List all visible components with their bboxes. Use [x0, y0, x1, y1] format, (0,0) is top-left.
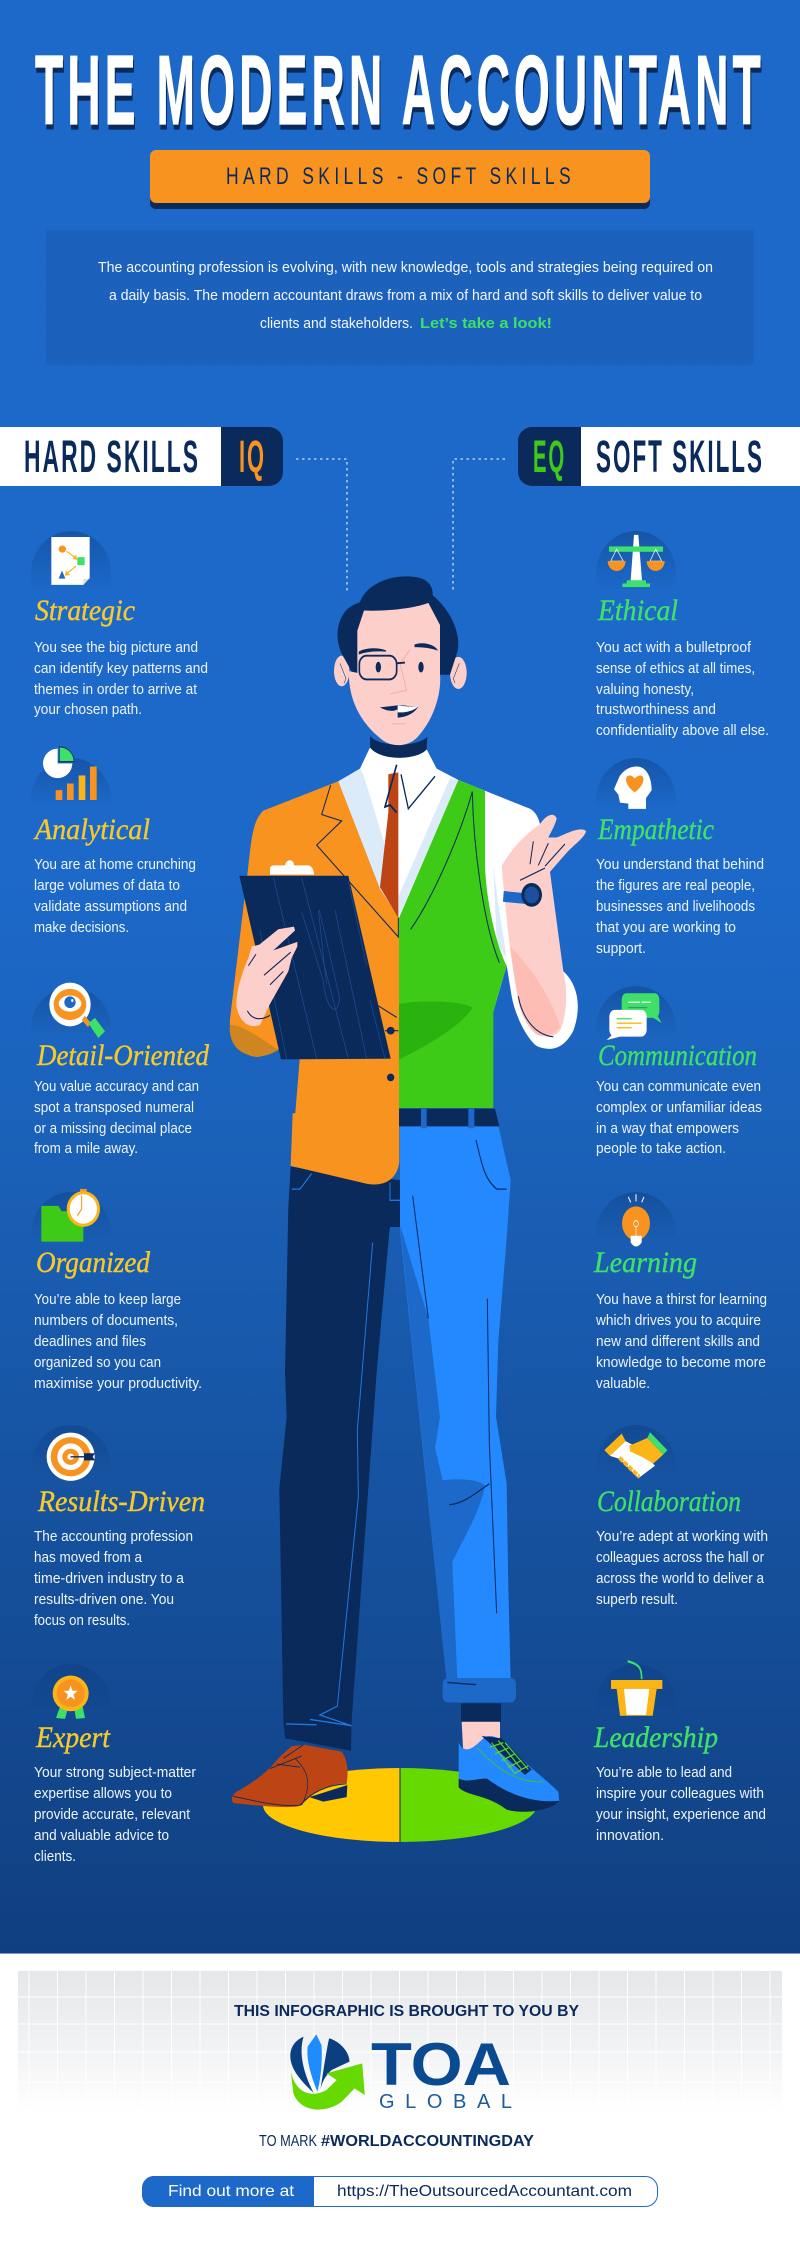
icon: light bulb	[596, 1192, 676, 1247]
heading: Strategic	[35, 594, 135, 627]
figure upper body	[230, 576, 586, 1146]
description	[34, 1079, 199, 1157]
icon: folder and clock	[31, 1189, 111, 1242]
description: confidentiality above all else.	[596, 723, 769, 739]
description: innovation.	[596, 1828, 664, 1844]
floor ellipse	[263, 1768, 537, 1842]
description: superb result.	[596, 1592, 678, 1608]
banner: hard skills IQ: HARD SKILLS	[24, 431, 200, 482]
description	[34, 640, 208, 718]
description: You see the big picture and	[34, 640, 198, 656]
subtitle button	[150, 150, 650, 209]
description: You understand that behind	[596, 857, 764, 873]
banner: soft skills EQ	[518, 427, 800, 486]
heading: Results-Driven	[37, 1485, 205, 1518]
description: has moved from a	[34, 1550, 143, 1566]
description: make decisions.	[34, 920, 129, 936]
banner: soft skills EQ: EQ	[533, 431, 566, 482]
panel: Organized	[31, 1189, 202, 1392]
figure: accountant	[230, 576, 586, 1812]
icon: target and dart	[31, 1425, 111, 1481]
description: your chosen path.	[34, 702, 142, 718]
subtitle button: HARD SKILLS - SOFT SKILLS	[226, 163, 575, 190]
description: colleagues across the hall or	[596, 1550, 764, 1566]
description: the figures are real people,	[596, 878, 755, 894]
logo: TOA Global: GLOBAL	[379, 2091, 512, 2113]
call to action pill: Find out more at	[168, 2183, 295, 2200]
panel: introduction: Let’s take a look!	[420, 315, 552, 332]
heading: Ethical	[597, 594, 678, 627]
description	[595, 1292, 767, 1392]
hashtag line: #WORLDACCOUNTINGDAY	[321, 2133, 534, 2150]
description: results-driven one. You	[34, 1592, 174, 1608]
panel: introduction: clients and stakeholders.	[260, 315, 413, 332]
description: valuable.	[596, 1376, 650, 1392]
description	[34, 1292, 202, 1392]
panel: Analytical	[31, 747, 196, 936]
icon: handshake	[596, 1425, 676, 1478]
panel: Leadership	[593, 1661, 766, 1844]
description: sense of ethics at all times,	[596, 661, 755, 677]
connector: right dotted line	[453, 459, 505, 592]
description: You have a thirst for learning	[596, 1292, 767, 1308]
call to action pill	[142, 2176, 658, 2207]
description: clients.	[34, 1849, 76, 1865]
heading: Communication	[598, 1039, 757, 1072]
panel: introduction	[46, 230, 754, 365]
description	[596, 857, 764, 957]
panel: Learning	[593, 1192, 767, 1392]
icon: magnifier with eye	[31, 983, 111, 1038]
description: time-driven industry to a	[34, 1571, 185, 1587]
description: support.	[596, 941, 646, 957]
heading: Analytical	[33, 813, 150, 846]
panel: Empathetic	[596, 758, 764, 957]
description: valuing honesty,	[596, 682, 694, 698]
description: You act with a bulletproof	[596, 640, 752, 656]
description: provide accurate, relevant	[34, 1807, 190, 1823]
description	[34, 1765, 196, 1865]
icon: podium	[596, 1661, 676, 1716]
logo: TOA Global	[290, 2031, 512, 2113]
figure lower body	[232, 1113, 559, 1812]
icon: strategy document	[31, 531, 111, 590]
connector: left dotted line	[296, 459, 347, 592]
panel: Results-Driven	[31, 1425, 205, 1629]
description	[596, 1529, 768, 1608]
description: You can communicate even	[596, 1079, 761, 1095]
description: organized so you can	[34, 1355, 161, 1371]
heading: Learning	[593, 1246, 697, 1279]
description: You’re able to keep large	[34, 1292, 181, 1308]
panel: Ethical	[596, 531, 769, 739]
description: maximise your productivity.	[34, 1376, 202, 1392]
heading: Empathetic	[597, 813, 714, 846]
description: from a mile away.	[34, 1141, 138, 1157]
description: Your strong subject-matter	[34, 1765, 196, 1781]
description: You’re adept at working with	[596, 1529, 768, 1545]
hashtag line: TO MARK	[259, 2133, 317, 2150]
description: numbers of documents,	[34, 1313, 178, 1329]
heading: Leadership	[593, 1721, 718, 1754]
description: deadlines and files	[34, 1334, 146, 1350]
description: or a missing decimal place	[34, 1121, 192, 1137]
description: You are at home crunching	[34, 857, 196, 873]
description: trustworthiness and	[596, 702, 716, 718]
heading: Organized	[36, 1246, 151, 1279]
icon: head with heart	[596, 758, 676, 810]
description: knowledge to become more	[596, 1355, 766, 1371]
description: in a way that empowers	[596, 1121, 739, 1137]
description: The accounting profession	[34, 1529, 193, 1545]
description: new and different skills and	[596, 1334, 760, 1350]
heading: Expert	[35, 1721, 111, 1754]
description: and valuable advice to	[34, 1828, 169, 1844]
icon: pie and bar chart	[31, 747, 111, 805]
panel: footer	[0, 1954, 800, 2254]
panel: Detail-Oriented	[31, 983, 210, 1157]
panel: Strategic	[31, 531, 208, 718]
description: large volumes of data to	[34, 878, 180, 894]
description: which drives you to acquire	[595, 1313, 761, 1329]
description: can identify key patterns and	[34, 661, 208, 677]
description: spot a transposed numeral	[34, 1100, 194, 1116]
icon: scales	[596, 531, 676, 590]
description: people to take action.	[596, 1141, 726, 1157]
description: You’re able to lead and	[596, 1765, 732, 1781]
sponsor line: THIS INFOGRAPHIC IS BROUGHT TO YOU BY	[234, 2003, 580, 2020]
icon: medal	[31, 1664, 111, 1719]
description	[596, 1765, 766, 1844]
description: that you are working to	[596, 920, 736, 936]
description: expertise allows you to	[34, 1786, 172, 1802]
description: across the world to deliver a	[596, 1571, 765, 1587]
banner: hard skills IQ	[0, 427, 283, 486]
call to action pill: https://TheOutsourcedAccountant.com	[337, 2183, 632, 2200]
description: complex or unfamiliar ideas	[596, 1100, 762, 1116]
description: validate assumptions and	[34, 899, 187, 915]
description	[34, 1529, 193, 1629]
description	[596, 1079, 762, 1157]
description: inspire your colleagues with	[596, 1786, 764, 1802]
heading: Detail-Oriented	[36, 1039, 210, 1072]
description	[34, 857, 196, 936]
panel: introduction: a daily basis. The modern accountant draws from a mix of hard and soft skills to deliver value to	[109, 287, 702, 304]
banner: hard skills IQ: IQ	[239, 431, 266, 482]
logo: TOA Global: TOA	[371, 2031, 511, 2098]
description: your insight, experience and	[596, 1807, 766, 1823]
description: You value accuracy and can	[34, 1079, 199, 1095]
panel: Collaboration	[596, 1425, 768, 1608]
heading: Collaboration	[597, 1485, 741, 1518]
panel: introduction: The accounting profession is evolving, with new knowledge, tools and strategies being required on	[98, 259, 713, 276]
description: themes in order to arrive at	[34, 682, 197, 698]
panel: Communication	[596, 986, 762, 1157]
description: focus on results.	[34, 1613, 130, 1629]
panel: Expert	[31, 1664, 196, 1865]
description	[596, 640, 769, 739]
icon: speech bubbles	[596, 986, 676, 1040]
description: businesses and livelihoods	[596, 899, 755, 915]
